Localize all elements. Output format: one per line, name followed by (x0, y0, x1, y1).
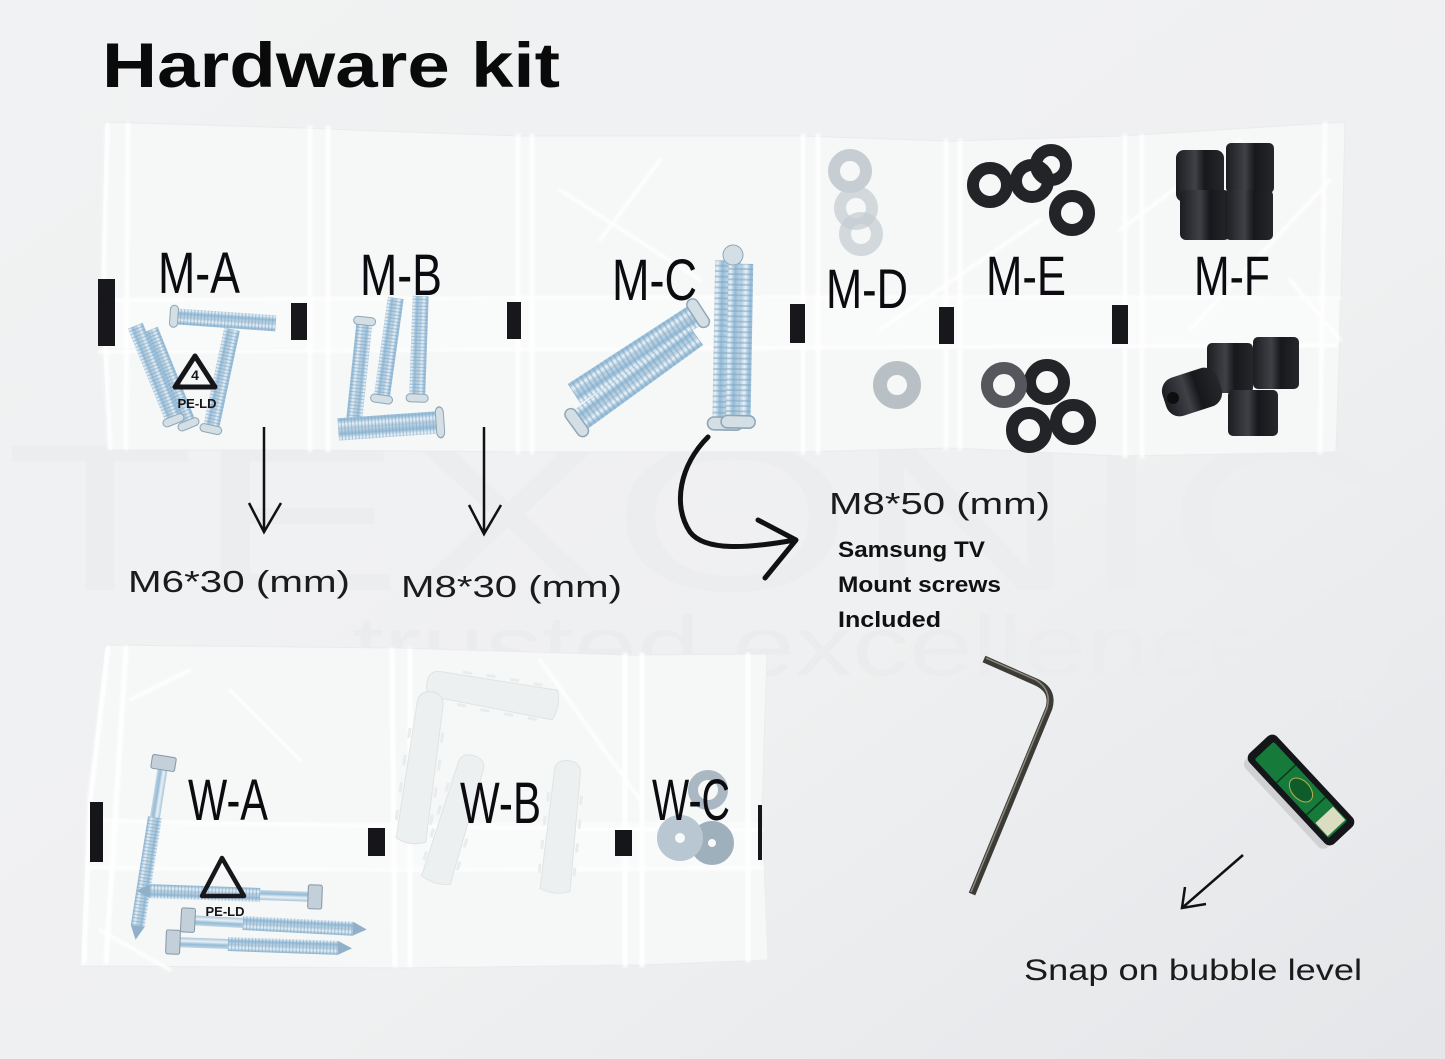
icon: hex key (971, 658, 1050, 894)
icon: snap-on bubble level (1240, 732, 1357, 853)
label: W-C: W-C (652, 768, 730, 833)
label: M-B: M-B (360, 243, 442, 308)
label: M-D: M-D (826, 257, 908, 320)
text: Samsung note: Mount screws (838, 572, 1001, 597)
watermark: brand name: TEXONIC (5, 400, 1390, 635)
registration marks (90, 802, 762, 862)
icon: watermark maple leaf (1287, 608, 1393, 715)
label: W-A: W-A (188, 768, 268, 833)
panel: M-E black washers (973, 150, 1090, 447)
text: Samsung note: Samsung TV (838, 537, 985, 562)
title: Hardware kit (102, 31, 560, 101)
label: M-E: M-E (986, 244, 1066, 307)
heat seals and creases (100, 124, 1340, 456)
panel: M-F black spacers (1158, 143, 1299, 436)
panel: M-A screws (125, 305, 277, 435)
panel: W-B wall anchors (392, 664, 587, 895)
registration marks (98, 279, 1128, 346)
text: bubble level caption: Snap on bubble level (1024, 954, 1362, 987)
label: M-A: M-A (158, 241, 240, 306)
icon: recycling PE-LD 4: PE-LD (178, 396, 216, 411)
bag body (100, 122, 1345, 456)
icon: recycling PE-LD 4: 4 (191, 367, 199, 383)
text: Samsung note (838, 537, 1001, 632)
arrow: M-C to size (680, 437, 796, 578)
label: M-C: M-C (612, 248, 697, 313)
icon: recycling PE-LD: PE-LD (206, 904, 244, 919)
text: M8*30 size: M8*30 (mm) (401, 569, 622, 604)
transparent band (104, 300, 1338, 348)
label: W-B: W-B (460, 771, 541, 836)
icon: recycling PE-LD (202, 858, 244, 919)
watermark: tagline: trusted excellence (352, 599, 1270, 693)
panel: mounting hardware bag strip (98, 122, 1345, 456)
arrow: to bubble level caption (1182, 855, 1243, 908)
heat seals and creases (84, 648, 762, 970)
panel: W-C washers (666, 775, 725, 856)
label: M-F: M-F (1194, 244, 1270, 307)
arrow: M-A to size (249, 427, 281, 532)
icon: recycling PE-LD 4 (175, 356, 216, 411)
panel: M-C screws (563, 245, 758, 439)
panel: wall hardware bag strip (80, 645, 768, 970)
bag body (80, 645, 768, 968)
panel: M-B screws (337, 296, 445, 445)
text: M6 size: M6*30 (mm) (128, 564, 350, 599)
text: M8*50 size: M8*50 (mm) (829, 486, 1050, 521)
panel: M-D washers (834, 155, 914, 402)
text: Samsung note: Included (838, 607, 941, 632)
arrow: M-B to size (469, 427, 501, 534)
transparent band (92, 822, 760, 868)
panel: W-A lag bolts (124, 754, 367, 960)
